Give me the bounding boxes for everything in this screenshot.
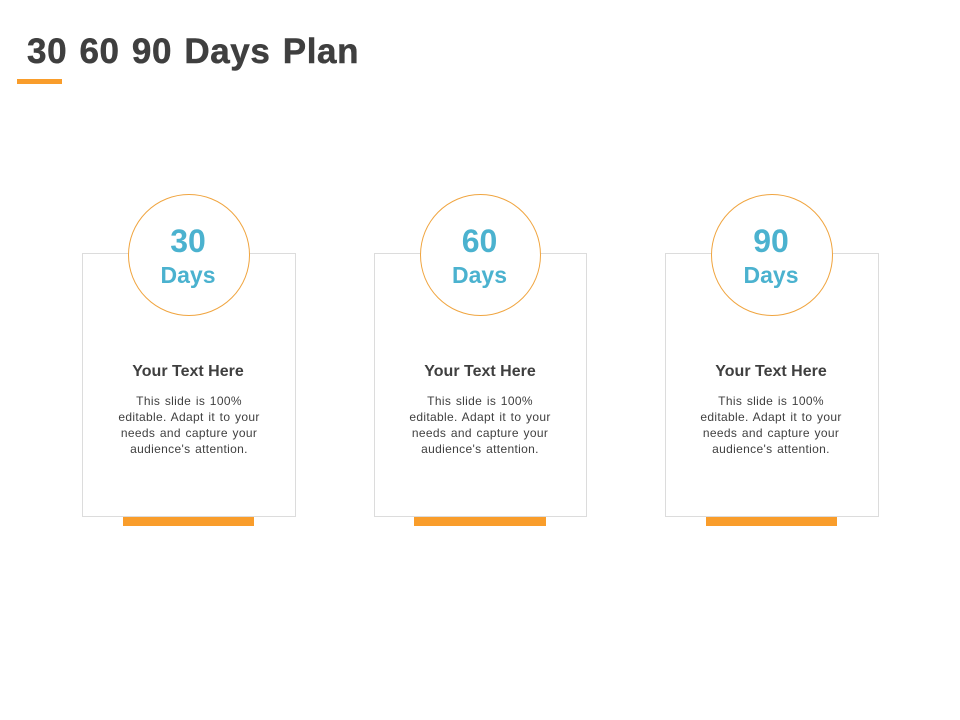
text block: 60 days: editable. Adapt it to your xyxy=(409,410,551,424)
text block: 90 days: This slide is 100% xyxy=(718,394,824,408)
circle: 60 days: Days xyxy=(452,262,507,288)
circle: 60 days: 60 xyxy=(462,223,497,259)
title: 30 60 90 Days Plan xyxy=(27,32,359,71)
text block: 90 days: needs and capture your xyxy=(703,426,839,440)
text block: 30 days xyxy=(118,394,260,456)
text block: 60 days: needs and capture your xyxy=(412,426,548,440)
text block: 60 days: This slide is 100% xyxy=(427,394,533,408)
text block: 30 days: audience's attention. xyxy=(130,442,248,456)
card: 90 days xyxy=(665,253,879,517)
circle: 30 days xyxy=(128,194,250,316)
circle: 90 days: Days xyxy=(744,262,798,288)
circle: 60 days xyxy=(420,194,541,316)
accent bar: 90 days xyxy=(706,517,837,526)
text block: 30 days: This slide is 100% xyxy=(136,394,242,408)
text block: 90 days: editable. Adapt it to your xyxy=(700,410,842,424)
accent bar: 30 days xyxy=(123,517,254,526)
heading: 90 days: Your Text Here xyxy=(715,363,827,380)
circle: 90 days xyxy=(711,194,833,316)
panel: 90 days xyxy=(665,194,879,526)
heading: 60 days: Your Text Here xyxy=(424,363,536,380)
text block: 30 days: editable. Adapt it to your xyxy=(118,410,260,424)
title underline accent xyxy=(17,79,62,84)
panel: 60 days xyxy=(374,194,587,526)
panel: 30 days xyxy=(82,194,296,526)
circle: 30 days: 30 xyxy=(170,223,206,259)
text block: 90 days: audience's attention. xyxy=(712,442,830,456)
text block: 60 days xyxy=(409,394,551,456)
heading: 30 days: Your Text Here xyxy=(132,363,244,380)
text block: 30 days: needs and capture your xyxy=(121,426,257,440)
text block: 60 days: audience's attention. xyxy=(421,442,539,456)
card: 60 days xyxy=(374,253,587,517)
text block: 90 days xyxy=(700,394,842,456)
circle: 30 days: Days xyxy=(160,262,215,288)
accent bar: 60 days xyxy=(414,517,546,526)
circle: 90 days: 90 xyxy=(753,223,789,259)
card: 30 days xyxy=(82,253,296,517)
